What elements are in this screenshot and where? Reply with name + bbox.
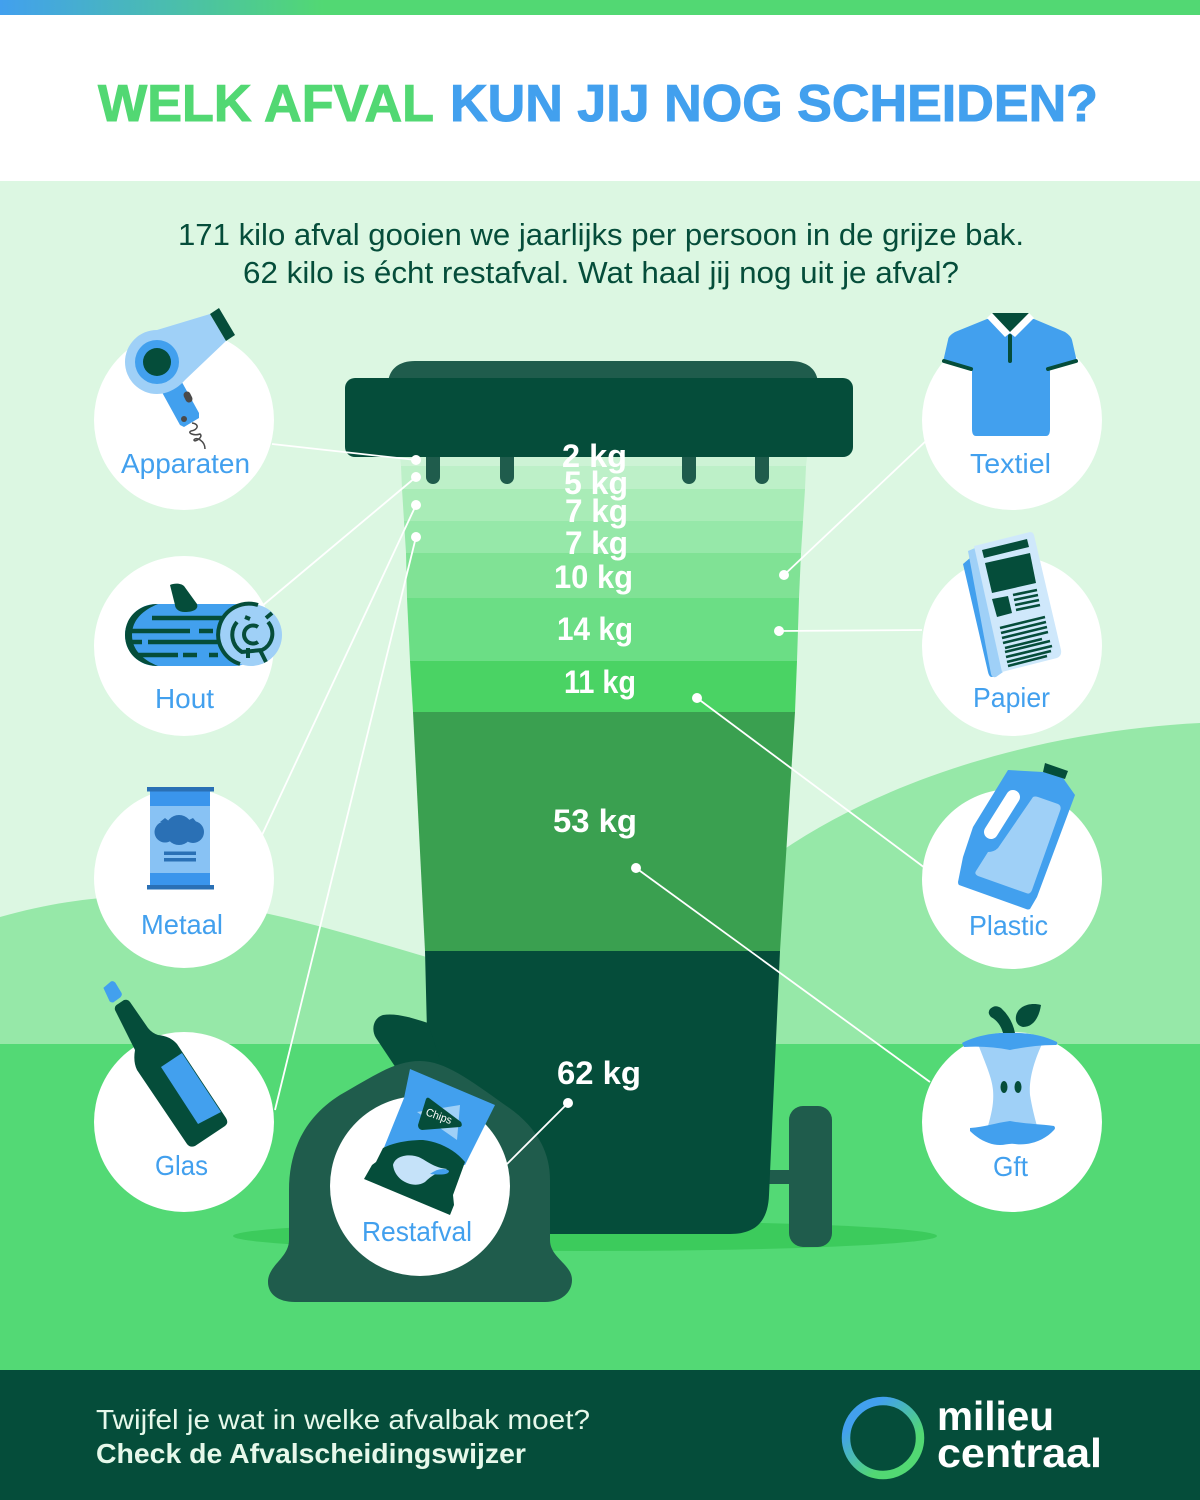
weight labels: 7 kg bbox=[565, 493, 628, 529]
weight labels: 53 kg bbox=[553, 803, 637, 839]
weight labels: 10 kg bbox=[554, 559, 633, 595]
panel: Hout bbox=[94, 556, 282, 736]
logo: centraal bbox=[937, 1430, 1102, 1476]
weight labels: 5 kg bbox=[564, 465, 628, 501]
panel: Papier: Papier bbox=[973, 682, 1050, 713]
intro text bbox=[178, 217, 1024, 290]
connector dots bbox=[411, 455, 789, 1108]
title bbox=[98, 75, 1098, 133]
bag knot bbox=[373, 1014, 440, 1068]
icon: hair dryer bbox=[125, 308, 235, 449]
weight labels: 62 kg bbox=[557, 1055, 641, 1091]
icon: chips bag bbox=[364, 1069, 495, 1215]
icon: plastic bottle bbox=[958, 763, 1075, 910]
icon: newspaper bbox=[963, 532, 1061, 677]
lid bbox=[345, 361, 853, 484]
bag body bbox=[268, 1061, 572, 1302]
weight labels: 11 kg bbox=[564, 664, 636, 700]
panel: Glas bbox=[94, 982, 274, 1212]
panel: Plastic bbox=[922, 763, 1102, 969]
wheel bbox=[765, 1106, 832, 1247]
icon: log bbox=[125, 584, 282, 666]
logo bbox=[846, 1393, 1102, 1476]
ground shadow bbox=[233, 1221, 937, 1251]
panel: Plastic: Plastic bbox=[969, 910, 1048, 941]
panel: Papier bbox=[922, 532, 1102, 736]
weight labels: 7 kg bbox=[565, 525, 628, 561]
panel: Gft bbox=[922, 1004, 1102, 1212]
panel: Metaal: Metaal bbox=[141, 909, 223, 940]
intro text: 171 kilo afval gooien we jaarlijks per persoon in de grijze bak. bbox=[178, 217, 1024, 252]
bin layers bbox=[400, 457, 807, 1234]
rubbish bag bbox=[268, 1014, 572, 1302]
footer text bbox=[96, 1404, 590, 1469]
panel: Metaal bbox=[94, 787, 274, 968]
panel: Apparaten: Apparaten bbox=[121, 448, 250, 479]
icon: polo shirt bbox=[943, 313, 1077, 436]
footer text: Twijfel je wat in welke afvalbak moet? bbox=[96, 1404, 590, 1435]
panel: Apparaten bbox=[94, 308, 274, 510]
waste bin bbox=[345, 361, 853, 1234]
connector lines bbox=[262, 440, 930, 1164]
icon: tin can bbox=[147, 787, 214, 890]
icon: chips bag: Chips bbox=[424, 1107, 454, 1127]
panel: Textiel bbox=[922, 313, 1102, 510]
top gradient bar bbox=[0, 0, 1200, 15]
panel: Glas: Glas bbox=[155, 1150, 208, 1181]
weight labels: 2 kg bbox=[562, 438, 627, 474]
icon: bottle bbox=[104, 982, 227, 1147]
title: KUN JIJ NOG SCHEIDEN? bbox=[450, 75, 1098, 133]
panel: Restafval: Restafval bbox=[362, 1216, 472, 1247]
weight labels bbox=[553, 438, 641, 1091]
panel: Textiel: Textiel bbox=[970, 448, 1051, 479]
icon: apple core bbox=[962, 1004, 1057, 1145]
footer bbox=[0, 1370, 1200, 1500]
intro text: 62 kilo is écht restafval. Wat haal jij nog uit je afval? bbox=[243, 255, 959, 290]
panel: Gft: Gft bbox=[993, 1151, 1028, 1182]
footer text: Check de Afvalscheidingswijzer bbox=[96, 1438, 526, 1469]
logo: milieu bbox=[937, 1393, 1054, 1439]
panel: Restafval bbox=[330, 1069, 510, 1276]
title: WELK AFVAL bbox=[98, 75, 434, 133]
panel: Hout: Hout bbox=[155, 683, 214, 714]
weight labels: 14 kg bbox=[557, 611, 633, 647]
